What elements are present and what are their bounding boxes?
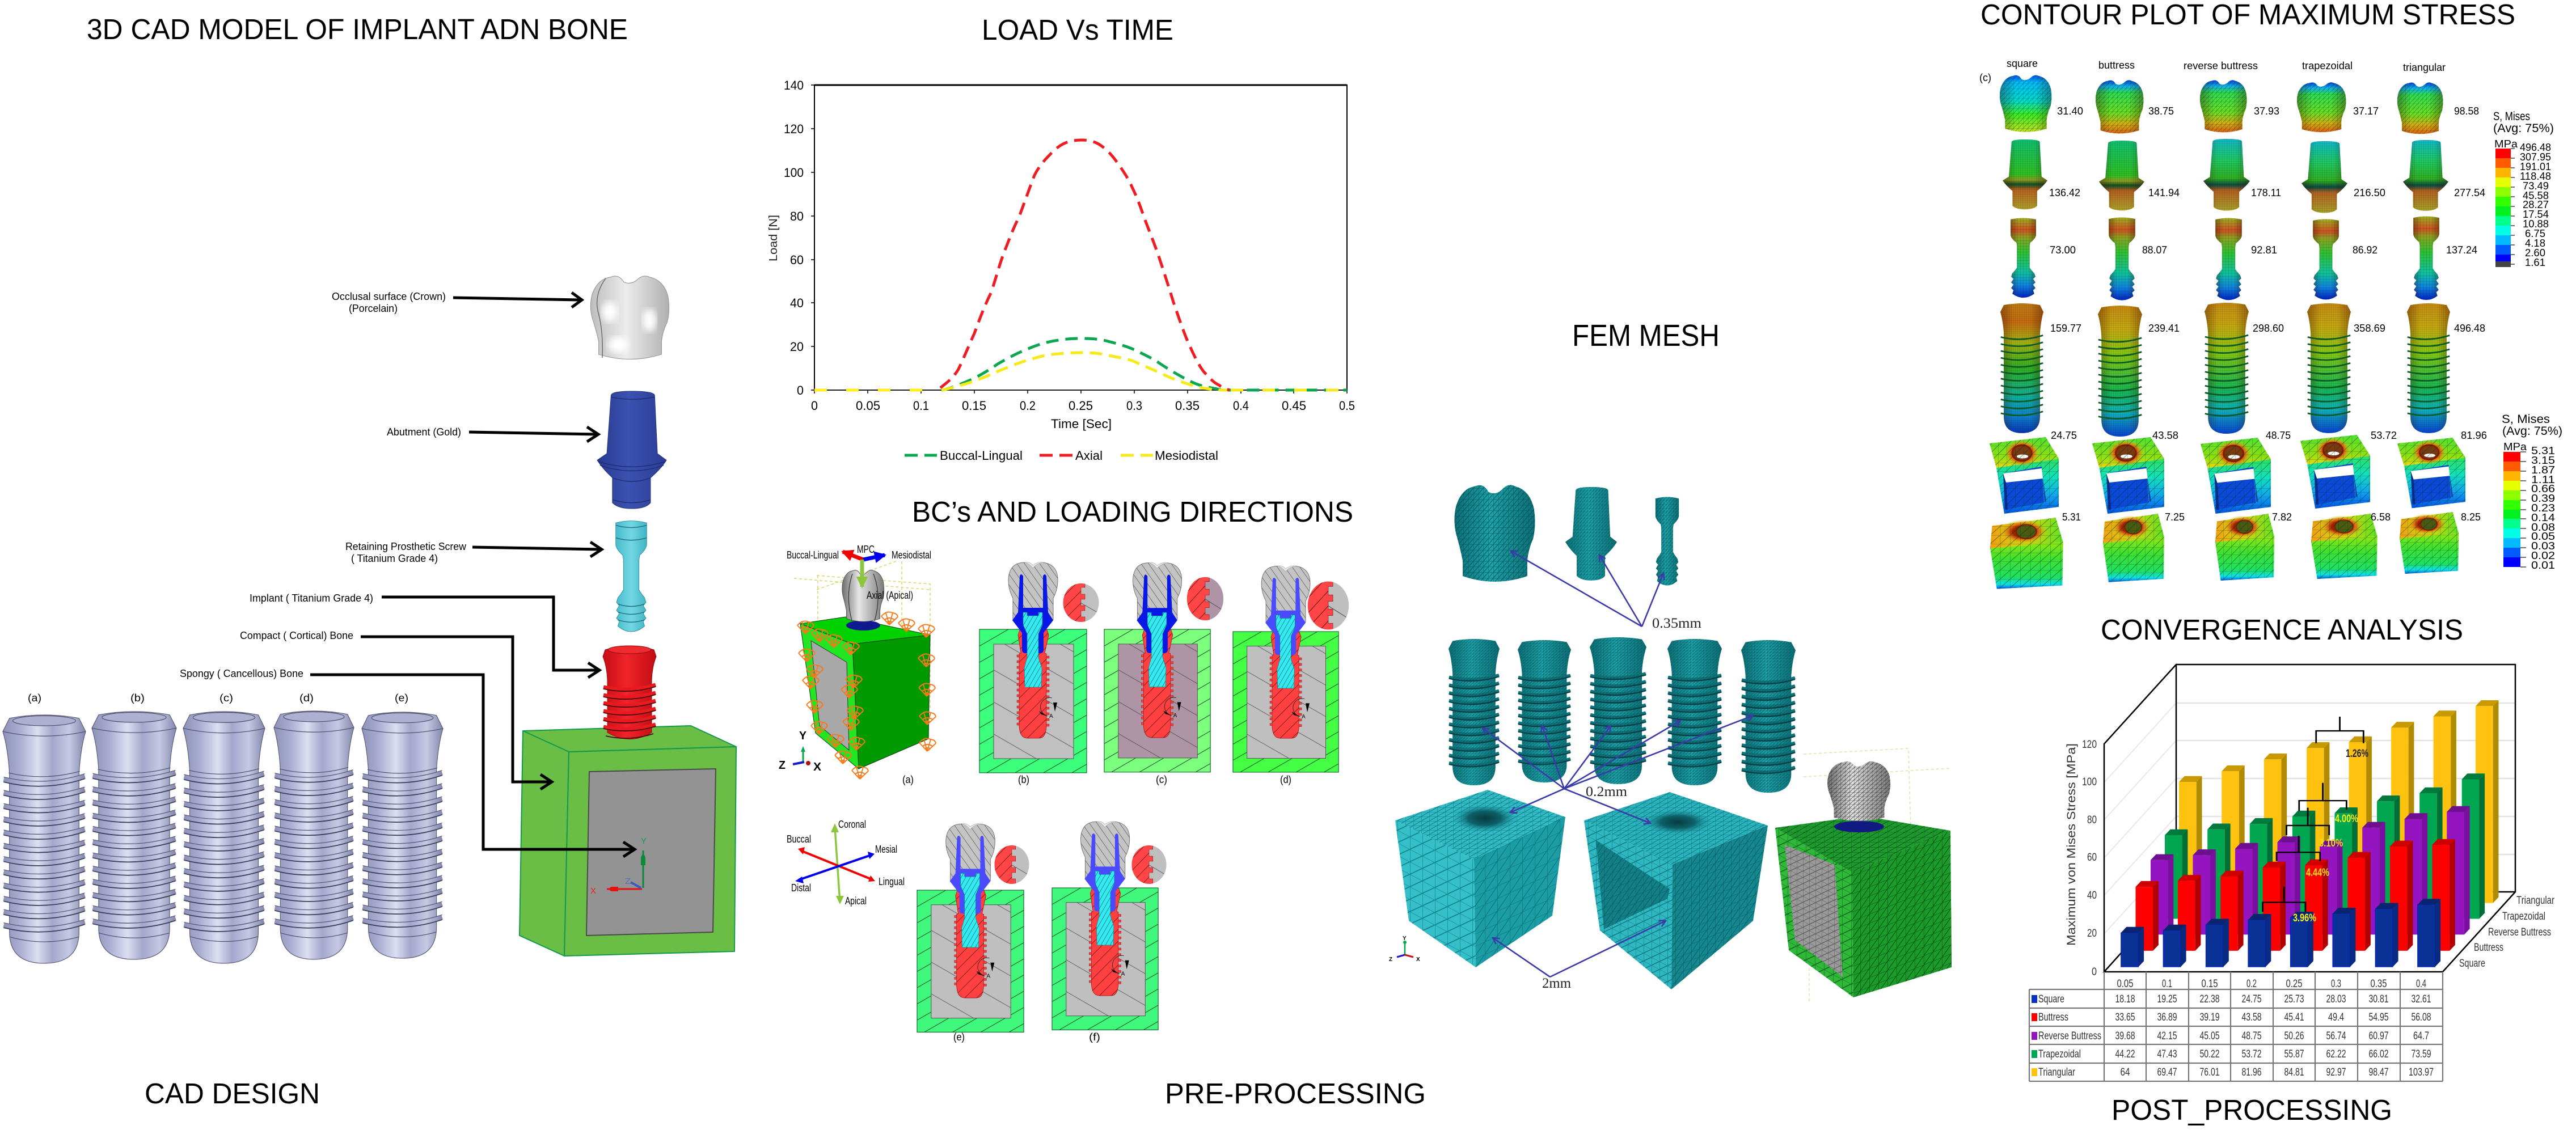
implant variant (a): (a) — [28, 692, 41, 704]
legend: von Mises scale, upper: 4.18 — [2525, 238, 2545, 249]
label: cancellous bone: Spongy ( Cancellous) Bone — [180, 668, 303, 679]
table row: triangular: 103.97 — [2409, 1066, 2434, 1078]
implant variant (c) — [183, 692, 265, 963]
y axis: values and title: 0 — [2092, 966, 2097, 978]
meshed bone block: outer — [1395, 790, 1565, 967]
line chart: load vs time: 0.5 — [1339, 399, 1355, 413]
legend: von Mises scale, lower: (Avg: 75%) — [2502, 425, 2562, 438]
meshed bone block: hollow cortical shell — [1584, 792, 1768, 989]
table row: buttress: 36.89 — [2157, 1012, 2177, 1023]
series: triangular — [2179, 700, 2498, 903]
row: screw stress: 88.07 — [2142, 244, 2167, 256]
cross-section (b) square thread: (b) — [1018, 774, 1029, 785]
legend: von Mises scale, upper: 118.48 — [2520, 171, 2551, 182]
y axis: values and title: 100 — [2082, 776, 2097, 788]
percent difference labels: 3.10% — [2319, 837, 2343, 849]
table row: reverse buttress: 56.74 — [2326, 1030, 2346, 1042]
legend: von Mises scale, lower: 0.39 — [2531, 493, 2555, 504]
cross-section (e) trapezoidal thread — [917, 824, 1034, 1043]
row: cancellous bone stress — [1990, 511, 2481, 589]
label: 2mm: 2mm — [1542, 976, 1572, 991]
table header: 0.35 — [2371, 978, 2387, 990]
legend: von Mises scale, upper: 6.75 — [2525, 228, 2545, 239]
series: buttress — [2135, 839, 2455, 951]
row: cortical bone stress: 48.75 — [2266, 430, 2291, 441]
label: screw: Retaining Prosthetic Screw — [345, 541, 467, 552]
cross-section (d) reverse buttress thread — [1233, 566, 1354, 785]
arrow: cortical bone — [361, 637, 552, 789]
data table — [2029, 972, 2443, 1081]
figure (a): boundary conditions on assembly: Buccal-Lingual — [787, 549, 839, 561]
label: implant: Implant ( Titanium Grade 4) — [250, 592, 373, 604]
cross-section (e) trapezoidal thread: (e) — [953, 1031, 965, 1043]
table row: triangular: 81.96 — [2241, 1066, 2262, 1078]
legend: von Mises scale, upper: 73.49 — [2523, 180, 2549, 192]
table row: buttress: 45.41 — [2284, 1012, 2304, 1023]
table header: 0.1 — [2162, 978, 2172, 990]
3D bars by thread shape — [2121, 700, 2498, 967]
panel: convergence analysis — [2029, 613, 2555, 1126]
label: 0.35mm: 0.35mm — [1652, 616, 1702, 631]
legend: von Mises scale, lower: MPa — [2503, 441, 2527, 452]
row: abutment stress: 136.42 — [2049, 187, 2080, 198]
loading direction axes: Distal — [791, 882, 811, 894]
table row: buttress: 33.65 — [2115, 1012, 2135, 1023]
figure (a): boundary conditions on assembly — [779, 544, 936, 785]
heading: BCs and loading directions: BC’s AND LOADING DIRECTIONS — [912, 496, 1353, 528]
implant variant (d) — [274, 692, 354, 959]
table header: 0.25 — [2286, 978, 2303, 990]
legend: von Mises scale, upper: (Avg: 75%) — [2493, 122, 2554, 135]
line chart: load vs time: Time [Sec] — [1051, 417, 1112, 431]
arrow: cancellous bone — [310, 675, 635, 857]
figure (a): boundary conditions on assembly: X — [813, 761, 822, 773]
table row: reverse buttress: 39.68 — [2115, 1030, 2135, 1042]
table row: buttress: 39.19 — [2199, 1012, 2220, 1023]
meshed abutment — [1565, 487, 1617, 581]
icon: FEM axes: Z — [1389, 957, 1392, 963]
table header: 0.2 — [2246, 978, 2257, 990]
table row: buttress: 49.4 — [2328, 1012, 2344, 1023]
line chart: load vs time: 0 — [797, 383, 804, 397]
column labels: (c) — [1979, 72, 1991, 83]
table row: square: 30.81 — [2368, 993, 2389, 1005]
row: screw stress: 92.81 — [2251, 244, 2277, 256]
table row: square: 28.03 — [2326, 993, 2346, 1005]
legend: von Mises scale, upper — [2493, 110, 2554, 268]
arrow: abutment — [469, 427, 598, 442]
figure (a): boundary conditions on assembly: Mesiodistal — [892, 549, 931, 561]
table row: square: Square — [2038, 993, 2064, 1005]
table row: trapezoidal: 47.43 — [2157, 1048, 2177, 1060]
heading: post-processing: POST_PROCESSING — [2112, 1094, 2392, 1126]
cross-section (f) triangular thread: (f) — [1089, 1031, 1100, 1043]
line chart: load vs time: 0.4 — [1233, 399, 1249, 413]
row: screw stress: 73.00 — [2050, 244, 2076, 256]
label: screw: ( Titanium Grade 4) — [351, 553, 438, 564]
brackets: percent differences — [2263, 717, 2363, 912]
figure (a): boundary conditions on assembly: (a) — [902, 774, 914, 785]
heading: CAD design: CAD DESIGN — [145, 1077, 320, 1110]
line chart: load vs time: 80 — [790, 209, 804, 223]
y axis: values and title: 20 — [2087, 928, 2097, 939]
icon: red implant — [603, 646, 656, 739]
loading direction axes: Coronal — [838, 819, 866, 830]
row: cancellous bone stress: 7.82 — [2272, 511, 2292, 523]
table row: reverse buttress: 60.97 — [2368, 1030, 2389, 1042]
table row: buttress: 56.08 — [2412, 1012, 2431, 1023]
row: crown stress: 31.40 — [2057, 105, 2083, 117]
implant variant (e): (e) — [395, 692, 408, 704]
legend: von Mises scale, lower: 3.15 — [2531, 455, 2555, 466]
column labels: square — [2007, 58, 2038, 69]
3D bar chart frame — [2104, 665, 2515, 972]
legend: von Mises scale, lower: 0.03 — [2531, 540, 2555, 552]
percent difference labels: 4.00% — [2335, 813, 2358, 825]
implant variant (b) — [92, 692, 176, 959]
legend: von Mises scale, upper: 496.48 — [2520, 142, 2551, 153]
column labels — [1979, 58, 2446, 83]
legend: von Mises scale, upper: 28.27 — [2523, 199, 2549, 210]
row: implant stress — [2000, 303, 2485, 437]
row: crown stress: 37.17 — [2353, 105, 2379, 117]
row: screw stress: 137.24 — [2446, 244, 2477, 256]
line chart: load vs time: 0.15 — [962, 399, 986, 413]
implant variant (d): (d) — [299, 692, 314, 704]
meshed assembly: crown on green block — [1775, 748, 1952, 1004]
legend: von Mises scale, lower: S, Mises — [2502, 413, 2550, 426]
table row: trapezoidal: 53.72 — [2241, 1048, 2262, 1060]
table row: square: 22.38 — [2199, 993, 2220, 1005]
depth axis labels: Triangular — [2516, 895, 2555, 907]
label: 0.2mm: 0.2mm — [1586, 784, 1628, 799]
title: load vs time: LOAD Vs TIME — [982, 14, 1173, 46]
row: cortical bone stress: 81.96 — [2461, 430, 2487, 441]
row: abutment stress: 277.54 — [2454, 187, 2485, 198]
row: cancellous bone stress: 8.25 — [2461, 511, 2481, 523]
table row: square: 25.73 — [2284, 993, 2304, 1005]
series: trapezoidal — [2165, 773, 2485, 919]
y axis: values and title: 40 — [2087, 890, 2097, 902]
row: implant stress: 298.60 — [2253, 323, 2284, 334]
table header: 0.4 — [2416, 978, 2426, 990]
line chart: load vs time: 40 — [790, 296, 804, 310]
figure (a): boundary conditions on assembly: MPC — [857, 544, 875, 555]
arrow: crown — [453, 293, 582, 307]
table row: trapezoidal: 62.22 — [2326, 1048, 2346, 1060]
line chart: load vs time: 20 — [790, 340, 804, 354]
label: crown: Occlusal surface (Crown) — [332, 291, 446, 302]
icon: retaining screw — [616, 521, 647, 632]
line chart: load vs time: Load [N] — [767, 215, 780, 261]
table row: trapezoidal: 50.22 — [2199, 1048, 2220, 1060]
label: abutment: Abutment (Gold) — [387, 426, 461, 438]
icon: FEM axes: Y — [1403, 936, 1407, 942]
table row: triangular — [2032, 1066, 2434, 1078]
table row: trapezoidal: 73.59 — [2412, 1048, 2431, 1060]
table row: reverse buttress — [2032, 1030, 2429, 1042]
row: implant stress: 239.41 — [2148, 323, 2180, 334]
arrows: 0.2mm mesh size — [1483, 716, 1753, 823]
table header: 0.3 — [2331, 978, 2341, 990]
series: square — [2121, 899, 2440, 967]
table row: square — [2032, 993, 2431, 1005]
row: cortical bone stress: 53.72 — [2371, 430, 2397, 441]
depth axis labels: Square — [2459, 958, 2485, 970]
y axis: values and title: 120 — [2082, 739, 2097, 751]
figure (a): boundary conditions on assembly: Z — [779, 759, 786, 772]
column labels: buttress — [2098, 60, 2135, 71]
legend: von Mises scale, lower: 0.66 — [2531, 483, 2555, 494]
legend: load directions — [905, 448, 1218, 463]
loading direction axes — [787, 819, 905, 907]
implant variant (e) — [362, 692, 443, 958]
row: screw stress: 86.92 — [2353, 244, 2377, 256]
line chart: load vs time: 0 — [811, 399, 818, 413]
arrow: implant — [382, 597, 599, 678]
table header — [2117, 978, 2426, 990]
legend: von Mises scale, upper: 2.60 — [2525, 247, 2545, 259]
legend: von Mises scale, upper: MPa — [2494, 138, 2518, 150]
icon: coordinate triad: Y — [641, 836, 647, 846]
depth axis labels: Trapezoidal — [2502, 911, 2545, 922]
legend: von Mises scale, lower: 0.01 — [2531, 560, 2555, 571]
label: cortical bone: Compact ( Cortical) Bone — [240, 630, 353, 641]
table row: triangular: 64 — [2120, 1066, 2130, 1078]
legend: von Mises scale, upper: 17.54 — [2523, 209, 2549, 220]
table row: triangular: 69.47 — [2157, 1066, 2177, 1078]
figure (a): boundary conditions on assembly: Axial (Apical) — [867, 590, 913, 601]
table row: trapezoidal — [2032, 1048, 2431, 1060]
row: crown stress — [2000, 75, 2479, 134]
legend: von Mises scale, lower: 0.02 — [2531, 550, 2555, 561]
row: cancellous bone stress: 5.31 — [2062, 511, 2081, 523]
series: reverse buttress — [2151, 806, 2470, 934]
row: cortical bone stress: 24.75 — [2051, 430, 2077, 441]
icon: porcelain crown — [590, 276, 669, 359]
table row: triangular: Triangular — [2038, 1066, 2076, 1078]
table row: triangular: 98.47 — [2368, 1066, 2389, 1078]
row: screw stress — [2011, 217, 2477, 301]
heading: pre-processing: PRE-PROCESSING — [1165, 1077, 1426, 1110]
arrows: 0.35mm mesh size — [1511, 551, 1663, 627]
legend: von Mises scale, lower — [2502, 413, 2562, 571]
table row: reverse buttress: 42.15 — [2157, 1030, 2177, 1042]
icon: FEM axes — [1389, 936, 1420, 963]
table row: trapezoidal: 44.22 — [2115, 1048, 2135, 1060]
title: 3D CAD model: 3D CAD MODEL OF IMPLANT ADN BONE — [87, 13, 628, 45]
loading direction axes: Lingual — [879, 876, 905, 887]
implant variant (b): (b) — [130, 692, 145, 704]
implant variant (c): (c) — [219, 692, 233, 704]
panel: contour plot of maximum stress — [1979, 0, 2562, 589]
legend: load directions: Buccal-Lingual — [940, 448, 1023, 463]
table row: triangular: 92.97 — [2326, 1066, 2346, 1078]
table row: buttress: Buttress — [2038, 1012, 2068, 1023]
row: implant stress: 496.48 — [2454, 323, 2485, 334]
icon: FEM axes: X — [1416, 957, 1420, 963]
table row: square: 19.25 — [2157, 993, 2177, 1005]
row: cortical bone stress: 43.58 — [2152, 430, 2178, 441]
meshed screw — [1656, 497, 1679, 586]
row: cancellous bone stress: 6.58 — [2371, 511, 2391, 523]
row: crown stress: 38.75 — [2148, 105, 2174, 117]
panel: CAD design — [3, 13, 736, 1110]
loading direction axes: Buccal — [787, 833, 811, 845]
arrow: screw — [472, 542, 602, 557]
legend: von Mises scale, upper: 10.88 — [2523, 218, 2549, 230]
row: abutment stress: 141.94 — [2148, 187, 2180, 198]
cross-section (f) triangular thread — [1052, 822, 1171, 1043]
row: abutment stress — [2003, 139, 2485, 213]
column labels: reverse buttress — [2184, 60, 2258, 71]
y axis: values and title: 80 — [2087, 814, 2097, 826]
loading direction axes: Mesial — [875, 844, 897, 855]
table row: square: 24.75 — [2241, 993, 2262, 1005]
legend: von Mises scale, upper: 307.95 — [2520, 151, 2551, 163]
meshed implants — [1449, 637, 1796, 793]
cross-section (d) reverse buttress thread: (d) — [1280, 774, 1291, 785]
table row: triangular: 84.81 — [2284, 1066, 2304, 1078]
label: crown — [332, 291, 446, 314]
implant variant (a) — [3, 692, 86, 963]
cross-section (b) square thread — [979, 562, 1104, 785]
arrows: 2mm mesh size — [1493, 921, 1666, 977]
percent difference labels: 1.26% — [2346, 748, 2368, 760]
y axis: values and title — [2065, 739, 2097, 978]
line chart: load vs time: 0.05 — [856, 399, 880, 413]
table row: reverse buttress: 64.7 — [2413, 1030, 2429, 1042]
table row: trapezoidal: 66.02 — [2368, 1048, 2389, 1060]
label: crown: (Porcelain) — [349, 303, 398, 314]
title: FEM mesh: FEM MESH — [1572, 319, 1720, 353]
row: implant stress: 358.69 — [2354, 323, 2385, 334]
legend: von Mises scale, lower: 5.31 — [2531, 445, 2555, 456]
row: cancellous bone stress: 7.25 — [2165, 511, 2185, 523]
percent difference labels: 3.96% — [2293, 912, 2316, 924]
table row: triangular: 76.01 — [2199, 1066, 2220, 1078]
meshed crown — [1454, 485, 1535, 582]
table row: buttress: 54.95 — [2368, 1012, 2389, 1023]
icon: coordinate triad: X — [590, 886, 596, 896]
row: abutment stress: 216.50 — [2354, 187, 2385, 198]
table row: trapezoidal: Trapezoidal — [2038, 1048, 2081, 1060]
cross-section (c) buttress thread — [1104, 562, 1228, 785]
table row: buttress — [2032, 1012, 2431, 1023]
table header: 0.05 — [2117, 978, 2134, 990]
legend: von Mises scale, lower: 0.23 — [2531, 502, 2555, 514]
row: crown stress: 98.58 — [2454, 105, 2479, 117]
depth axis labels: Buttress — [2474, 942, 2503, 954]
table row: reverse buttress: 50.26 — [2284, 1030, 2304, 1042]
label: screw — [345, 541, 467, 564]
depth axis labels — [2459, 895, 2555, 970]
line chart: load vs time: 0.2 — [1020, 399, 1036, 413]
table row: reverse buttress: 48.75 — [2241, 1030, 2262, 1042]
table row: square: 18.18 — [2115, 993, 2135, 1005]
row: implant stress: 159.77 — [2050, 323, 2081, 334]
line chart: load vs time: 120 — [784, 122, 804, 136]
line chart: load vs time: 0.35 — [1175, 399, 1200, 413]
row: cortical bone stress — [1990, 430, 2487, 514]
legend: load directions: Axial — [1075, 448, 1103, 463]
table row: square: 32.61 — [2412, 993, 2431, 1005]
line chart: load vs time: 0.45 — [1282, 399, 1306, 413]
row: crown stress: 37.93 — [2254, 105, 2279, 117]
icon: coordinate triad — [590, 836, 647, 896]
panel: pre-processing — [767, 14, 1426, 1110]
panel: FEM mesh — [1389, 319, 1952, 1004]
table row: reverse buttress: Reverse Buttress — [2038, 1030, 2101, 1042]
line chart: load vs time: 0.25 — [1069, 399, 1093, 413]
line chart: load vs time — [767, 78, 1355, 431]
legend: von Mises scale, lower: 1.11 — [2531, 474, 2555, 485]
legend: von Mises scale, upper: S, Mises — [2493, 110, 2530, 123]
line chart: load vs time: 0.3 — [1126, 399, 1142, 413]
row: abutment stress: 178.11 — [2251, 187, 2281, 198]
table header: 0.15 — [2202, 978, 2218, 990]
icon: coordinate triad: Z — [625, 877, 631, 886]
legend: load directions: Mesiodistal — [1155, 448, 1218, 463]
y axis: values and title: 60 — [2087, 852, 2097, 864]
column labels: triangular — [2403, 62, 2446, 73]
table row: reverse buttress: 45.05 — [2199, 1030, 2220, 1042]
icon: gold abutment — [597, 391, 666, 509]
icon: bone block — [520, 726, 736, 956]
line chart: load vs time: 60 — [790, 253, 804, 267]
legend: von Mises scale, upper: 45.58 — [2523, 190, 2549, 201]
y axis: values and title: Maximum von Mises Stress [MPa] — [2065, 743, 2078, 946]
depth axis labels: Reverse Buttress — [2488, 926, 2551, 938]
title: convergence analysis: CONVERGENCE ANALYSIS — [2101, 613, 2463, 646]
line chart: load vs time: 100 — [784, 166, 804, 180]
cross-section (c) buttress thread: (c) — [1156, 774, 1167, 785]
figure (a): boundary conditions on assembly: Y — [799, 730, 807, 742]
legend: von Mises scale, lower: 0.08 — [2531, 522, 2555, 533]
legend: von Mises scale, lower: 0.05 — [2531, 531, 2555, 542]
loading direction axes: Apical — [845, 895, 867, 907]
percent difference labels: 4.44% — [2306, 867, 2329, 879]
percent difference labels — [2293, 748, 2368, 924]
column labels: trapezoidal — [2302, 60, 2353, 71]
line chart: load vs time: 140 — [784, 78, 804, 92]
legend: von Mises scale, upper: 1.61 — [2525, 257, 2545, 268]
legend: von Mises scale, lower: 1.87 — [2531, 464, 2555, 476]
table row: trapezoidal: 55.87 — [2284, 1048, 2304, 1060]
legend: von Mises scale, upper: 191.01 — [2520, 161, 2551, 172]
line chart: load vs time: 0.1 — [913, 399, 929, 413]
legend: von Mises scale, lower: 0.14 — [2531, 512, 2555, 523]
table row: buttress: 43.58 — [2241, 1012, 2262, 1023]
